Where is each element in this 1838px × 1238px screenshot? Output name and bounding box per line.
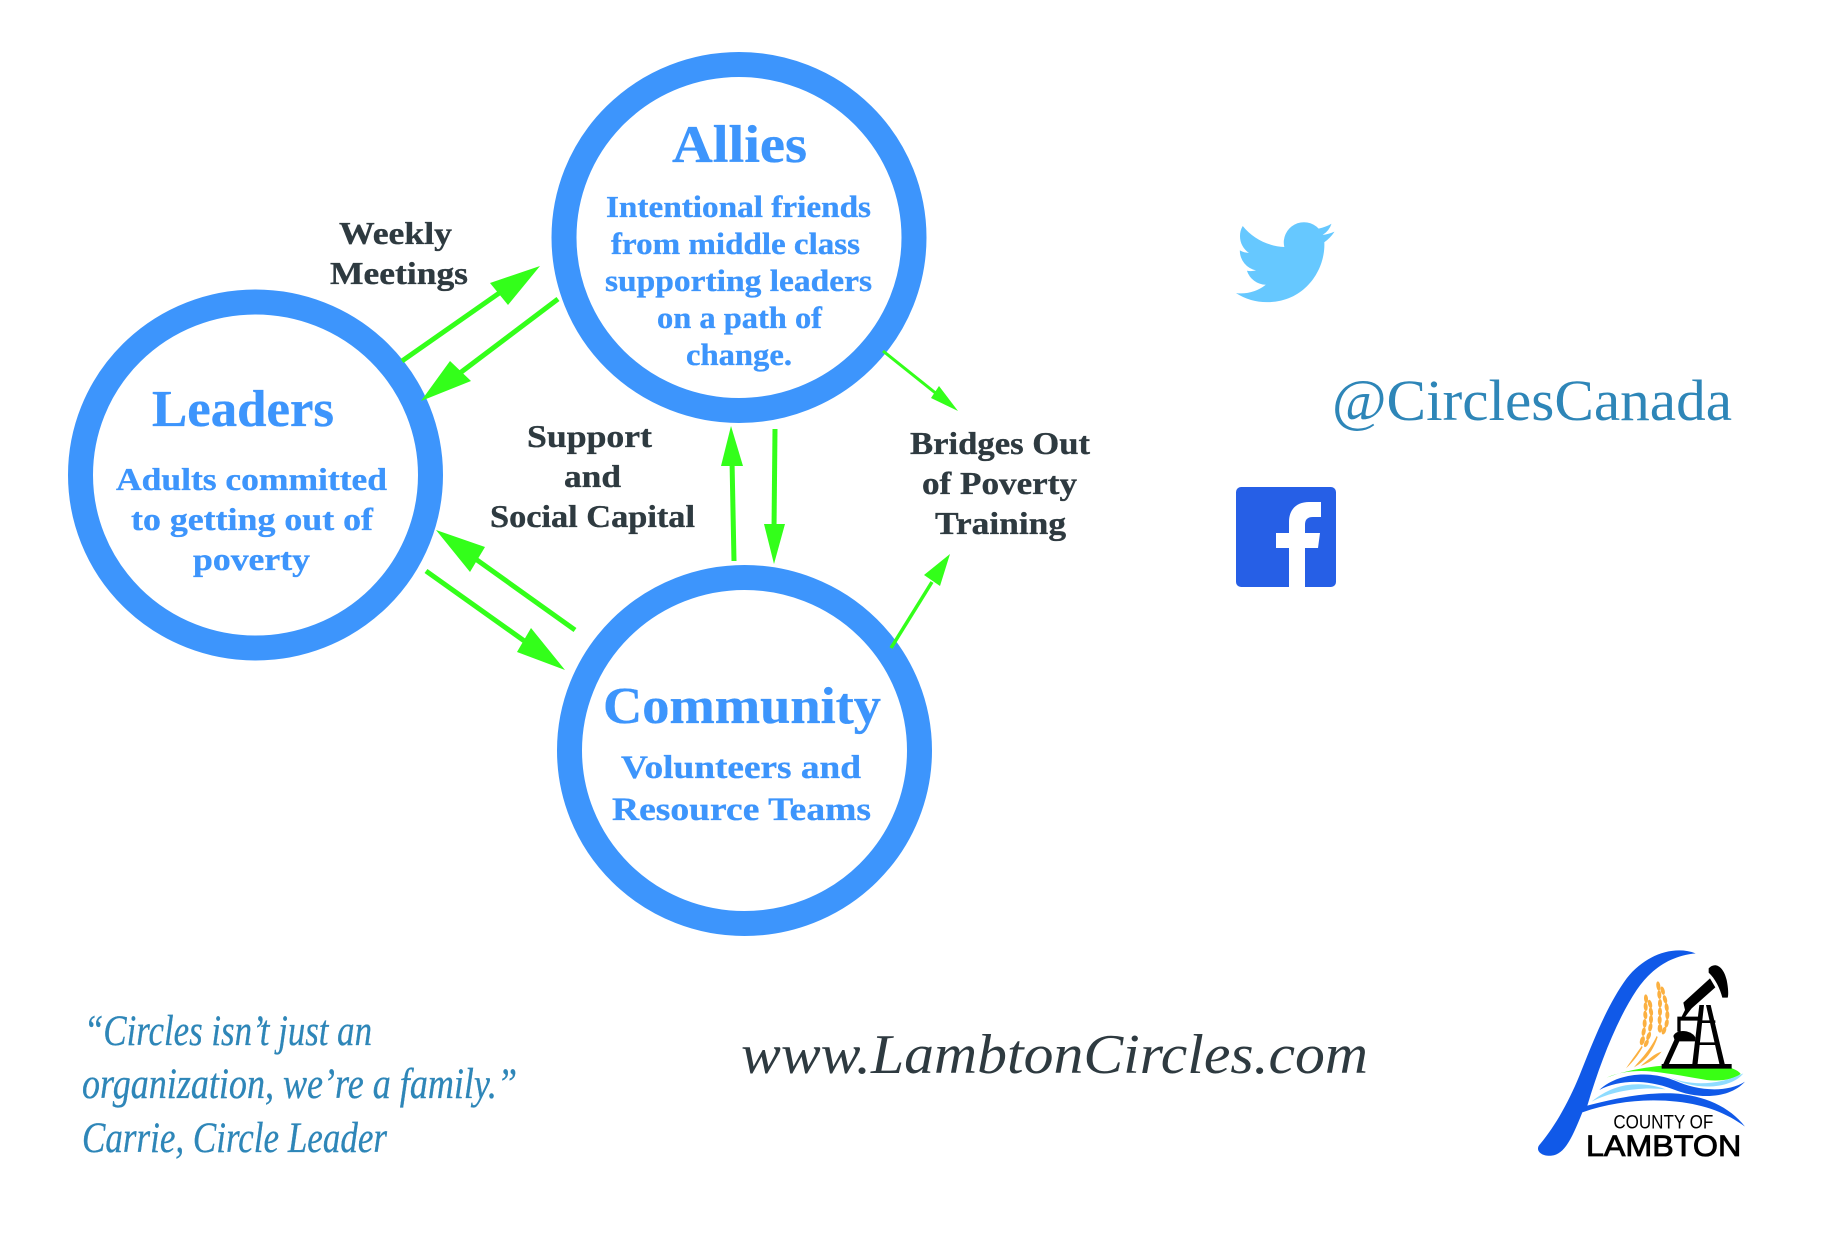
logo text: Lambton: LAMBTON [1586,1130,1741,1163]
text block: Allies description: Intentional friends [606,189,871,224]
label: Support and Social Capital [490,418,695,534]
arrow: Community to Bridges training [891,554,950,648]
text block: Community description: Volunteers and [621,750,861,786]
text block: quote: “Circles isn’t just an [84,1008,372,1055]
text: twitter handle: @CirclesCanada [1332,368,1732,433]
label: Support and Social Capital: and [564,458,621,494]
text block: Leaders description [116,461,387,577]
text block: quote: Carrie, Circle Leader [82,1115,387,1162]
heading: Leaders: Leaders [152,381,334,438]
arrow: Community to Allies [721,426,743,561]
text block: Community description: Resource Teams [612,792,871,828]
text block: Leaders description: to getting out of [131,501,373,537]
text block: Allies description: from middle class [611,226,860,261]
panel: Allies circle [564,64,914,410]
icon: facebook [1236,487,1336,587]
logo text: County of: COUNTY OF [1613,1112,1713,1133]
heading: Community: Community [603,678,881,735]
panel: Community circle [570,578,920,924]
text block: quote: organization, we’re a family.” [82,1061,517,1108]
label: Bridges Out of Poverty Training [910,425,1090,541]
text block: Community description [612,750,871,828]
label: Support and Social Capital: Support [527,418,652,454]
label: Bridges Out of Poverty Training: Training [935,505,1066,541]
arrow: Leaders to Community [426,571,565,670]
logo swoosh [1538,950,1745,1156]
logo pump jack [1662,965,1732,1069]
label: Weekly Meetings [330,215,468,291]
logo wheat [1626,981,1669,1068]
text block: Leaders description: poverty [193,541,310,577]
label: Bridges Out of Poverty Training: of Poverty [922,465,1077,501]
label: Support and Social Capital: Social Capital [490,498,695,534]
logo green hill [1607,1064,1741,1081]
arrow: Allies to Bridges training [883,351,958,411]
arrow: Allies to Leaders [421,299,558,401]
heading: Allies: Allies [672,116,807,174]
logo: County of Lambton [1538,950,1745,1163]
text block: Allies description: on a path of [657,300,823,335]
arrow: Allies to Community [764,429,785,564]
label: Weekly Meetings: Weekly [339,215,452,251]
text: website: www.LambtonCircles.com [741,1024,1368,1086]
panel: Leaders circle [80,302,430,648]
icon: twitter bird [1236,222,1334,302]
label: Weekly Meetings: Meetings [330,255,468,291]
logo waves [1599,1075,1745,1096]
label: Bridges Out of Poverty Training: Bridges Out [910,425,1090,461]
text block: quote [82,1008,517,1162]
text block: Allies description: change. [686,337,792,372]
arrow: Community to Leaders [436,530,575,630]
text block: Allies description [605,189,872,372]
text block: Allies description: supporting leaders [605,263,872,298]
text block: Leaders description: Adults committed [116,461,387,497]
arrow: Leaders to Allies [402,266,540,361]
